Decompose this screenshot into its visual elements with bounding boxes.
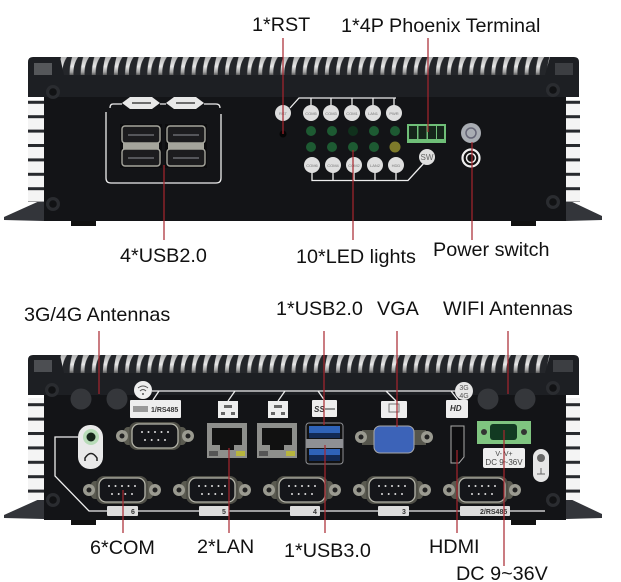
LED indicator panel: COM6: [306, 163, 319, 168]
callout lines rear: [99, 331, 508, 566]
label: 1*USB2.0: 1*USB2.0: [276, 298, 363, 320]
COM badges: [107, 506, 510, 516]
LED indicator panel: COM1: [346, 111, 359, 116]
icon: wifi badge: [134, 381, 152, 399]
label: 1*RST: 1*RST: [252, 14, 310, 36]
audio jack: [78, 425, 103, 469]
LED indicator panel: COM5: [305, 111, 318, 116]
label: VGA: VGA: [377, 298, 420, 320]
LED indicator panel: COM2: [348, 163, 361, 168]
LED indicator panel: RST: [279, 111, 288, 116]
LAN ports: [207, 423, 297, 458]
icons: corner screws: [46, 83, 560, 211]
white guide lines: [55, 391, 545, 511]
green DC terminal: [477, 421, 531, 444]
ground screw: [533, 449, 549, 482]
DC label: [483, 448, 525, 468]
LED indicator panel: SW: [421, 153, 434, 162]
COM badges: 6: [131, 509, 135, 516]
VGA port: [355, 426, 433, 453]
LED indicator panel: COM4: [327, 163, 340, 168]
COM badges: 4: [313, 509, 317, 516]
badge: 1/RS485: [130, 400, 181, 418]
LED indicator panel: COM3: [325, 111, 338, 116]
LED indicator panel: HDD: [392, 163, 400, 168]
USB 2.0 panel: [106, 97, 221, 183]
label: WIFI Antennas: WIFI Antennas: [443, 298, 573, 320]
COM ports: [83, 422, 521, 504]
rear chassis: [4, 355, 602, 525]
DC label: DC 9~36V: [485, 458, 523, 467]
panel: rear view of device: [4, 331, 602, 566]
COM badges: 3: [402, 509, 406, 516]
badge: 1/RS485: 1/RS485: [151, 407, 178, 414]
HDMI port: [451, 426, 464, 463]
DC label: V- V+: [495, 451, 513, 458]
badge: VGA: [381, 401, 407, 418]
label: 4*USB2.0: 4*USB2.0: [120, 245, 207, 267]
label: 1*4P Phoenix Terminal: 1*4P Phoenix Terminal: [341, 15, 540, 37]
badge: HD: [446, 400, 468, 418]
label: 1*USB3.0: 1*USB3.0: [284, 540, 371, 562]
USB 3.0 ports: [306, 423, 343, 464]
LED indicator panel: LAN2: [370, 163, 381, 168]
icons: rear screws: [45, 381, 560, 507]
label: 6*COM: 6*COM: [90, 537, 155, 559]
label: HDMI: HDMI: [429, 536, 480, 558]
icons: LAN badges: [218, 401, 288, 418]
antenna connectors: [70, 388, 536, 410]
badge: SS USB: SS: [314, 405, 325, 414]
badge: HD: HD: [450, 404, 462, 413]
callout lines front: [164, 38, 472, 240]
badge: SS USB: [312, 400, 337, 417]
LED indicator panel: PWR: [389, 111, 399, 116]
power switch: [461, 123, 481, 166]
badge: 3G 4G: 4G: [459, 393, 469, 400]
LED indicator panel: LAN1: [368, 111, 379, 116]
COM badges: 2/RS485: [480, 509, 507, 516]
LED indicator panel: [275, 98, 435, 180]
label: 3G/4G Antennas: 3G/4G Antennas: [24, 304, 170, 326]
badge: 3G 4G: 3G: [459, 385, 469, 392]
4P Phoenix terminal: [407, 124, 446, 143]
panel: front view of device: [4, 38, 602, 240]
label: 10*LED lights: 10*LED lights: [296, 246, 416, 268]
label: Power switch: Power switch: [433, 239, 550, 261]
label: 2*LAN: 2*LAN: [197, 536, 254, 558]
COM badges: 5: [222, 509, 226, 516]
front chassis: [4, 57, 602, 226]
badge: 3G 4G: [455, 382, 473, 400]
